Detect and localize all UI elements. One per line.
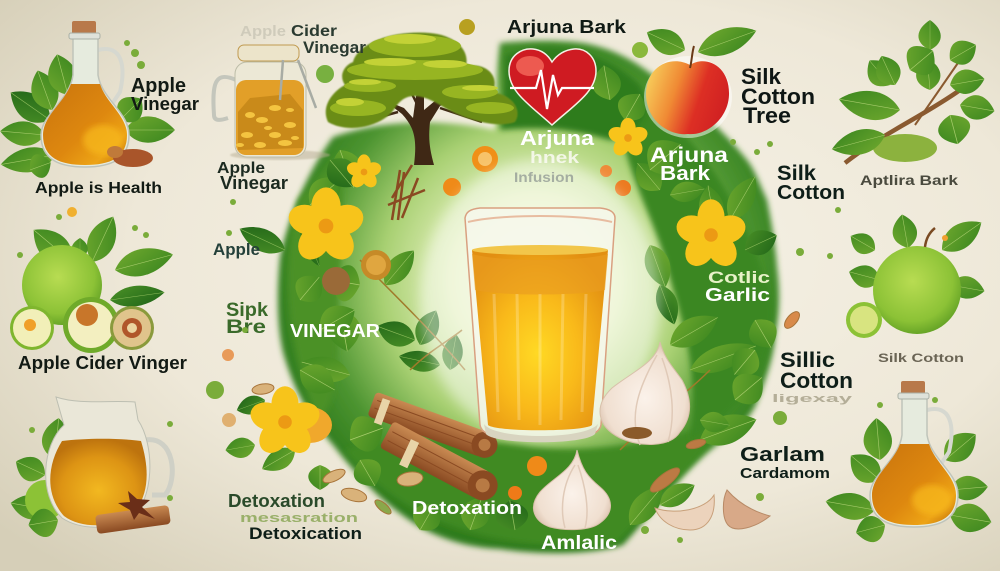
text: apple vinegar below jar: Vinegar (220, 173, 288, 193)
text: garlic cardamom (740, 444, 830, 482)
text: faint blurred label: Silk Cotton (878, 351, 964, 365)
text: arjuna bark top: Arjuna Bark (507, 17, 627, 37)
icon: green apple with lime, right (845, 212, 988, 338)
text: detoxation labels: mesasration (240, 510, 358, 525)
text: sillic cotton: ligexay (772, 393, 854, 405)
icon: garlic cloves (655, 490, 770, 530)
text: arjuna bark white (650, 144, 728, 185)
icon: small yellow flower upper left (345, 154, 383, 190)
text: white arjuna label: hnek (530, 148, 580, 167)
text: cotlic garlic: Cotlic (708, 268, 770, 287)
text: sillic cotton: Sillic (780, 349, 835, 372)
icon: yellow flower lower left (247, 386, 332, 459)
text: detoxation labels (228, 491, 362, 543)
icon: orange medallions (316, 19, 648, 500)
icon: large garlic bulb (600, 342, 690, 445)
text: apple vinegar (131, 75, 199, 114)
icon: red heart with pulse (509, 49, 596, 125)
text: silk cotton (777, 162, 845, 204)
text: garlic cardamom: Cardamom (740, 465, 830, 482)
tree (326, 33, 518, 165)
text: silk cotton tree: Cotton (741, 84, 815, 109)
text: sillic cotton: Cotton (780, 368, 853, 393)
text: apple cider vinegar by jar: Cider (291, 23, 337, 40)
text: sipk bre (226, 300, 268, 338)
text: apple, left of circle: Apple (213, 240, 260, 259)
text: apple cider vinegar by jar (240, 23, 366, 57)
icon: red apple with leaves (642, 19, 760, 138)
text: detoxation labels: Detoxication (249, 524, 362, 543)
text: white vinegar: VINEGAR (290, 321, 380, 341)
icon: glass of golden infusion (420, 160, 660, 442)
text: apple cider vinger: Apple Cider Vinger (18, 353, 187, 373)
icon: bark twigs (388, 165, 425, 220)
icon: vinegar bottle bottom right (823, 381, 994, 546)
text: silk cotton: Silk (777, 162, 816, 185)
icon: green apple with halves, left (10, 211, 176, 353)
panel: central green herbal circle (224, 41, 784, 553)
leaves and foliage in the circle (224, 63, 784, 537)
text: detoxation labels: Detoxation (228, 491, 325, 511)
text: sipk bre: Sipk (226, 300, 268, 321)
text: arjuna bark white: Bark (660, 163, 711, 185)
text: silk cotton tree (741, 64, 815, 128)
icon: lower garlic bulb (533, 450, 611, 530)
text: apple is health: Apple is Health (35, 180, 162, 197)
icon: small flower by apple (606, 118, 650, 159)
icon: apple cider vinegar bottle, top left (0, 21, 175, 181)
icon: jar of vinegar (213, 45, 330, 160)
icon: leafy branch (829, 20, 997, 163)
text: sipk bre: Bre (226, 317, 266, 338)
text: arjuna bark white: Arjuna (650, 144, 728, 167)
text: apple vinegar: Apple (131, 75, 186, 97)
text: apple vinegar: Vinegar (131, 94, 199, 114)
text: silk cotton tree: Tree (743, 103, 791, 128)
text: detoxation white: Detoxation (412, 498, 522, 518)
icon: pitcher with cinnamon and star anise (8, 397, 172, 540)
text: white arjuna label (514, 128, 595, 185)
text: apple cider vinegar by jar: Apple (240, 23, 286, 40)
icon: cinnamon sticks (367, 392, 503, 506)
text: apple cider vinegar by jar: Vinegar (303, 38, 366, 57)
text: white arjuna label: Infusion (514, 169, 574, 185)
text: garlic cardamom: Garlam (740, 444, 825, 466)
icon: yellow flower upper right (673, 199, 749, 272)
text: amlalic: Amlalic (541, 533, 617, 554)
text: cotlic garlic: Garlic (705, 285, 770, 305)
text: apple vinegar below jar: Apple (217, 160, 265, 177)
text: silk cotton tree: Silk (741, 64, 782, 89)
text: cotlic garlic (705, 268, 770, 305)
icon: large yellow flower (285, 187, 367, 266)
text: silk cotton: Cotton (777, 182, 845, 204)
icon: almonds (251, 309, 802, 516)
text: apple vinegar below jar (217, 160, 288, 193)
text: aptlira bark: Aptlira Bark (860, 172, 958, 188)
text: white arjuna label: Arjuna (520, 128, 595, 150)
text: sillic cotton (772, 349, 854, 405)
